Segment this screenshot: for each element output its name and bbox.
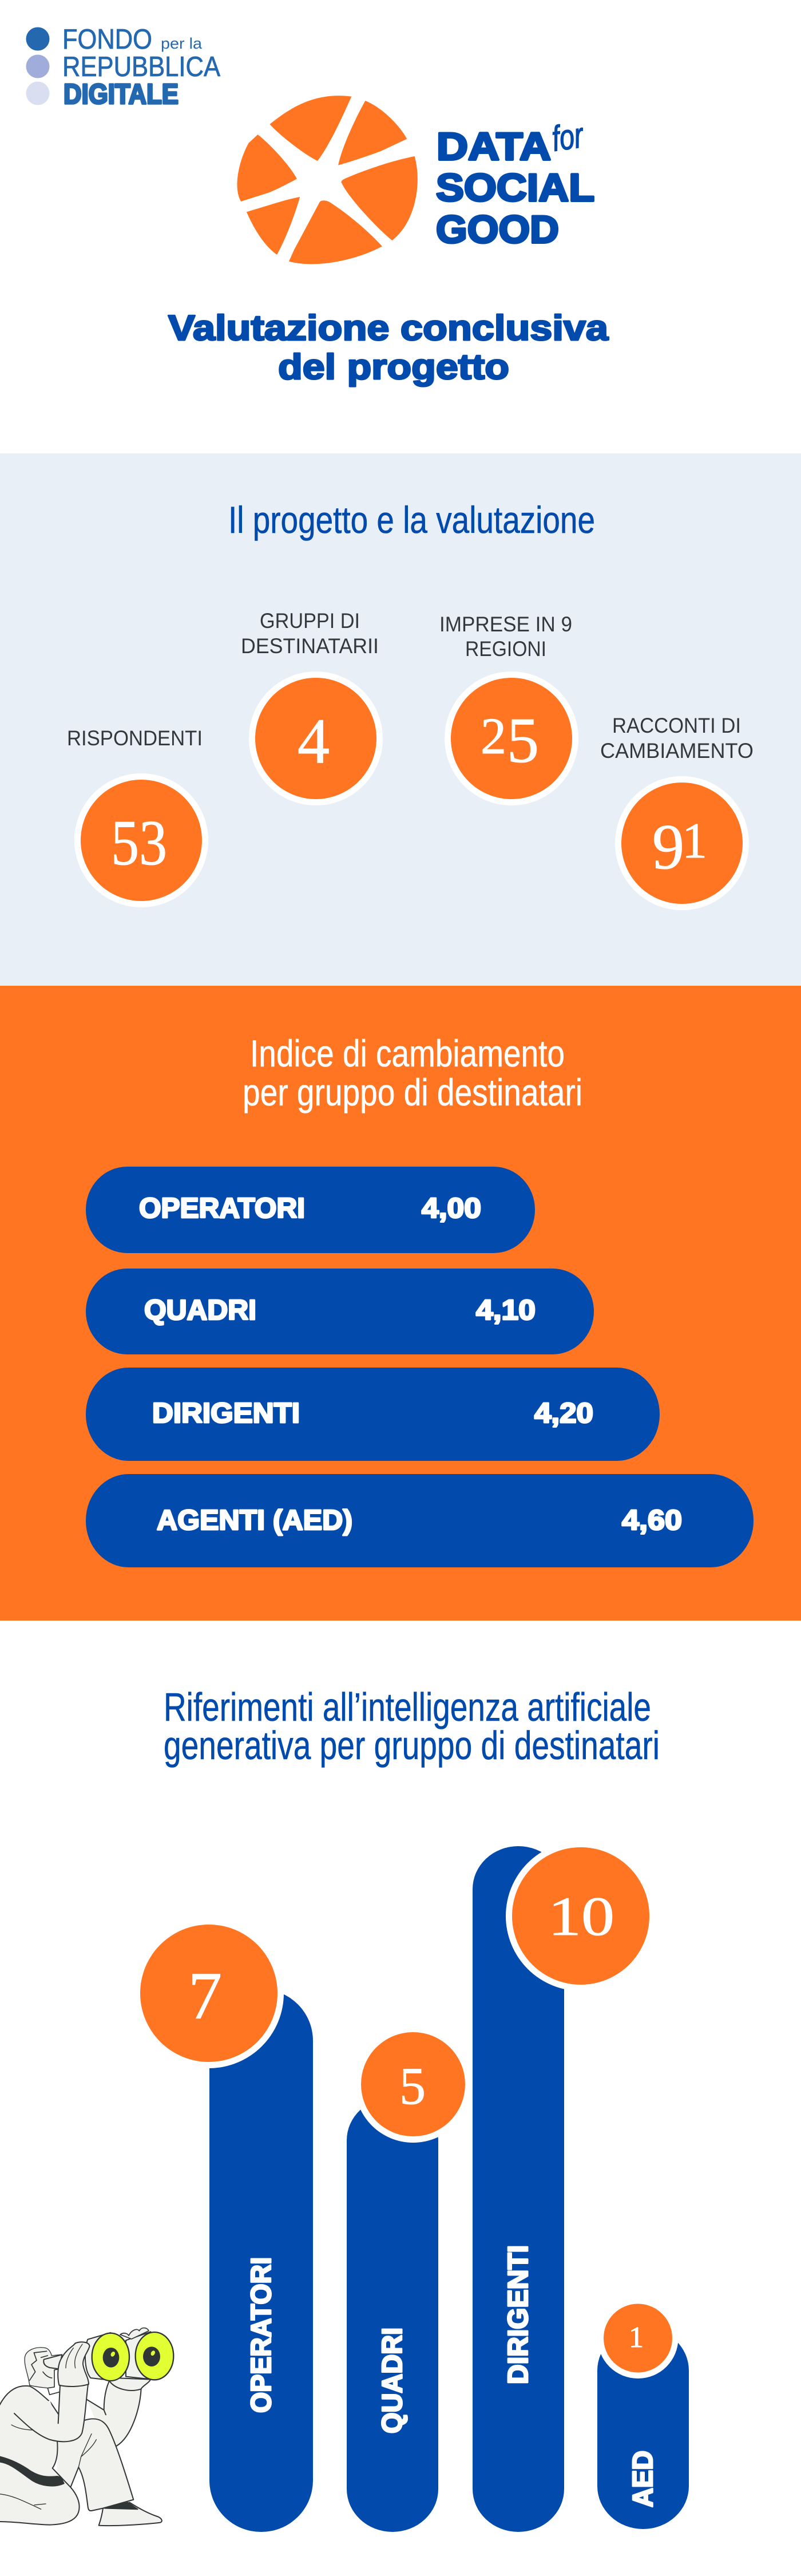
heading: Indice di cambiamento bbox=[250, 1032, 565, 1074]
stat: imprese in 9 regioni bbox=[439, 613, 578, 805]
far arm bbox=[87, 2381, 141, 2446]
heading: per gruppo di destinatari bbox=[243, 1071, 582, 1113]
column: operatori 7 bbox=[134, 1918, 313, 2532]
column: dirigenti 10: 10 bbox=[548, 1886, 614, 1947]
stat: gruppi di destinatari bbox=[241, 609, 383, 805]
bar: dirigenti 4,20: 4,20 bbox=[534, 1398, 593, 1429]
face line bbox=[30, 2351, 52, 2380]
binocular tube right bbox=[126, 2332, 153, 2380]
front leg bbox=[57, 2419, 133, 2511]
lens right bbox=[136, 2332, 173, 2380]
stat: racconti di cambiamento bbox=[600, 714, 754, 910]
panel: il progetto e la valutazione bbox=[0, 453, 801, 986]
column: quadri 5 bbox=[347, 2026, 471, 2532]
stat: imprese in 9 regioni: REGIONI bbox=[465, 637, 546, 661]
stat: racconti di cambiamento: CAMBIAMENTO bbox=[600, 739, 754, 762]
bar: agenti (AED) 4,60: 4,60 bbox=[622, 1505, 682, 1536]
logo wordmark: Data for Social Good: DATA bbox=[437, 125, 551, 168]
logo wordmark: Data for Social Good: GOOD bbox=[436, 208, 559, 251]
heading: riferimenti all'intelligenza artificiale: generativa per gruppo di destinatari bbox=[164, 1723, 660, 1768]
stat: racconti di cambiamento: RACCONTI DI bbox=[612, 714, 741, 737]
stat: gruppi di destinatari: 4 bbox=[298, 706, 330, 777]
lens left bbox=[92, 2333, 129, 2381]
near arm bbox=[14, 2384, 88, 2441]
stat: gruppi di destinatari: DESTINATARII bbox=[241, 634, 379, 658]
stat: imprese in 9 regioni: 2 bbox=[481, 708, 506, 765]
rear leg and torso bbox=[0, 2386, 84, 2525]
bar: agenti (AED) 4,60 bbox=[86, 1474, 754, 1567]
logo: Data for Social Good mark bbox=[237, 96, 418, 264]
column: operatori 7: 7 bbox=[188, 1958, 222, 2033]
column: AED 1: 1 bbox=[629, 2321, 644, 2354]
stat: rispondenti: 53 bbox=[111, 808, 167, 879]
collar bbox=[47, 2369, 60, 2395]
panel: indice di cambiamento bbox=[0, 986, 801, 1621]
far hand fingers bbox=[120, 2328, 149, 2339]
far hand bbox=[109, 2378, 150, 2391]
stat: racconti di cambiamento: 9 bbox=[652, 812, 684, 883]
stat: racconti di cambiamento: 1 bbox=[682, 813, 707, 869]
stat: imprese in 9 regioni: IMPRESE IN 9 bbox=[439, 613, 572, 636]
illustration: person with binoculars bbox=[0, 2328, 173, 2526]
column: operatori 7: OPERATORI bbox=[246, 2257, 277, 2413]
logo: Fondo per la Repubblica Digitale: FONDO bbox=[62, 24, 152, 55]
column: quadri 5: 5 bbox=[399, 2057, 426, 2115]
stat: rispondenti: RISPONDENTI bbox=[67, 726, 203, 750]
logo wordmark: Data for Social Good: SOCIAL bbox=[436, 166, 594, 210]
bar: agenti (AED) 4,60: AGENTI (AED) bbox=[157, 1505, 352, 1536]
stat: gruppi di destinatari: GRUPPI DI bbox=[260, 609, 360, 633]
bar: dirigenti 4,20 bbox=[86, 1368, 660, 1461]
column: AED 1: AED bbox=[628, 2451, 659, 2507]
bar: quadri 4,10: 4,10 bbox=[476, 1295, 536, 1326]
thigh details bbox=[0, 2425, 96, 2509]
heading: riferimenti all'intelligenza artificiale bbox=[164, 1685, 660, 1768]
column: dirigenti 10: DIRIGENTI bbox=[503, 2245, 534, 2384]
title bbox=[168, 309, 609, 387]
column: dirigenti 10 bbox=[473, 1841, 656, 2532]
logo: Fondo per la Repubblica Digitale: REPUBBLICA bbox=[62, 52, 220, 82]
near hand bbox=[58, 2342, 90, 2387]
bar: quadri 4,10: QUADRI bbox=[144, 1295, 256, 1326]
title: Valutazione conclusiva bbox=[168, 309, 609, 348]
bar: quadri 4,10 bbox=[86, 1269, 594, 1354]
title: del progetto bbox=[278, 347, 509, 387]
binocular tube left bbox=[85, 2333, 113, 2380]
chart: riferimenti per gruppo bbox=[134, 1841, 689, 2532]
logo wordmark: Data for Social Good bbox=[436, 116, 594, 251]
logo: Fondo per la Repubblica Digitale: per la bbox=[161, 35, 203, 52]
heading bbox=[243, 1032, 582, 1113]
heading: riferimenti all'intelligenza artificiale: Riferimenti all’intelligenza artificiale bbox=[164, 1685, 651, 1729]
binocular eyepiece bbox=[43, 2354, 62, 2369]
bar: dirigenti 4,20: DIRIGENTI bbox=[152, 1398, 300, 1429]
logo: Fondo per la Repubblica Digitale bbox=[26, 24, 220, 110]
shoe bbox=[99, 2503, 162, 2526]
stat: imprese in 9 regioni: 5 bbox=[507, 705, 539, 776]
column: quadri 5: QUADRI bbox=[377, 2328, 408, 2433]
logo: Fondo per la Repubblica Digitale: DIGITALE bbox=[64, 79, 179, 110]
bar: operatori 4,00: 4,00 bbox=[422, 1193, 481, 1224]
logo wordmark: Data for Social Good: for bbox=[549, 116, 586, 159]
bar: operatori 4,00 bbox=[86, 1167, 535, 1253]
sash bbox=[0, 2457, 64, 2486]
heading: Il progetto e la valutazione bbox=[228, 499, 595, 541]
bar: operatori 4,00: OPERATORI bbox=[139, 1193, 305, 1224]
head bbox=[25, 2348, 61, 2391]
column: AED 1 bbox=[597, 2298, 689, 2529]
stat: rispondenti bbox=[67, 726, 208, 907]
